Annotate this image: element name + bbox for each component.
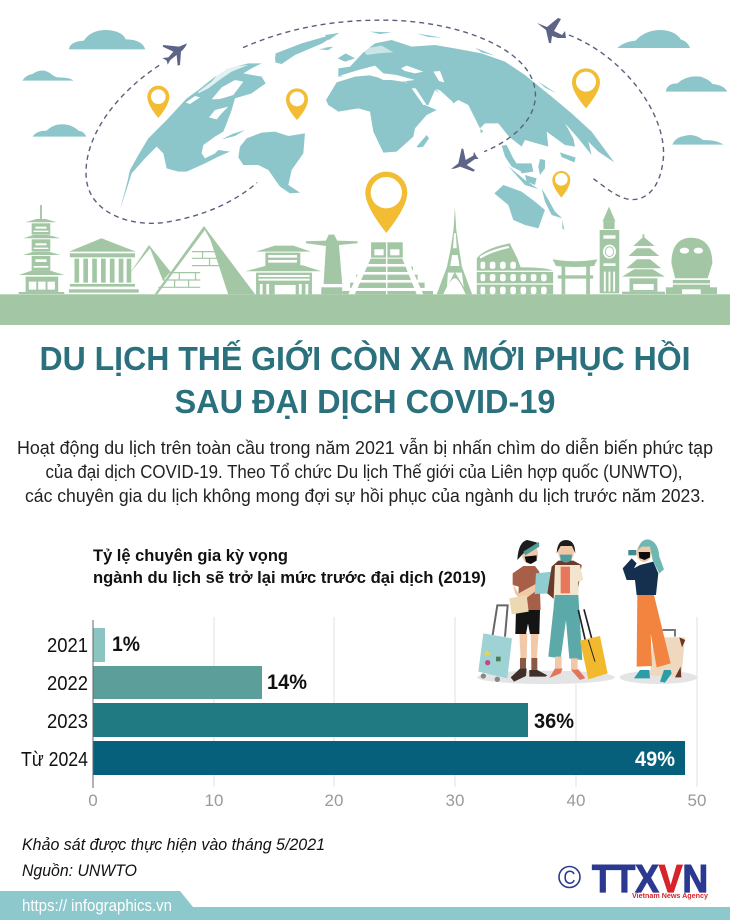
TTXVN logo: TTXVN [592, 858, 708, 901]
traveler with yellow suitcase [535, 540, 608, 680]
airplanes [162, 18, 566, 172]
footer band with URL [0, 891, 730, 920]
value labels: 36% [534, 710, 574, 733]
South America [238, 132, 305, 193]
bar: 2021 [94, 628, 105, 662]
category labels: 2022 [47, 673, 88, 695]
x axis labels: 50 [688, 791, 706, 810]
landmark: pagoda [19, 205, 64, 294]
landmark: pyramids [129, 226, 255, 294]
category labels: 2021 [47, 635, 88, 657]
British Isles and Arctic islands [325, 32, 557, 93]
bar: Từ 2024 [94, 741, 685, 775]
landmark: greek temple [69, 238, 139, 293]
title: DU LỊCH THẾ GIỚI CÒN XA MỚI PHỤC HỒI [40, 340, 690, 377]
chart title: Tỷ lệ chuyên gia kỳ vọng [93, 546, 288, 565]
intro paragraph: của đại dịch COVID-19. Theo Tổ chức Du lịch Thế giới của Liên hợp quốc (UNWTO), [46, 462, 682, 482]
footer band with URL: https:// infographics.vn [22, 896, 172, 915]
x axis labels [88, 791, 706, 810]
ground shadows [477, 671, 697, 684]
map pins [147, 68, 600, 233]
category labels: 2023 [47, 711, 88, 733]
world map: Americas [120, 33, 339, 210]
Africa [326, 75, 437, 153]
value labels [112, 633, 675, 771]
landmark: torii gate [553, 259, 597, 294]
clouds [22, 30, 727, 145]
dashed flight paths [86, 20, 664, 223]
survey note and source [22, 836, 325, 880]
landmark: Sphinx [666, 238, 717, 294]
intro paragraph: các chuyên gia du lịch không mong đợi sự hồi phục của ngành du lịch trước năm 2023. [25, 486, 705, 506]
bar: 2023 [94, 703, 528, 737]
value labels: 1% [112, 633, 140, 656]
chart title [93, 546, 486, 587]
title [40, 340, 690, 420]
value labels: 49% [635, 748, 675, 771]
hero illustration: world map and landmarks [0, 18, 730, 325]
landmark: Eiffel tower [437, 207, 472, 294]
title: SAU ĐẠI DỊCH COVID-19 [174, 383, 556, 420]
category labels: Từ 2024 [21, 749, 88, 771]
intro paragraph: Hoạt động du lịch trên toàn cầu trong năm 2021 vẫn bị nhấn chìm do diễn biến phức tạp [17, 437, 713, 458]
world map: Eurasia, Africa, Australia [325, 32, 614, 230]
TTXVN logo: C [564, 868, 576, 889]
category labels [21, 635, 88, 771]
landmark: Asian palace [245, 246, 321, 294]
Madagascar [417, 135, 429, 148]
illustration: masked travelers with suitcases [477, 539, 697, 684]
chart title: ngành du lịch sẽ trở lại mức trước đại dịch (2019) [93, 568, 486, 587]
intro paragraph [17, 437, 713, 506]
survey note and source: Khảo sát được thực hiện vào tháng 5/2021 [22, 836, 325, 854]
survey note and source: Nguồn: UNWTO [22, 862, 137, 880]
TTXVN logo: Vietnam News Agency [632, 891, 709, 900]
bar: 2022 [94, 666, 262, 699]
Australia [494, 185, 545, 228]
x axis labels: 0 [88, 791, 98, 810]
value labels: 14% [267, 671, 307, 694]
landmark: Big Ben [600, 207, 619, 293]
skyline and ground [0, 205, 730, 325]
Eurasia [338, 40, 614, 162]
x axis labels: 30 [446, 791, 464, 810]
traveler with teal suitcase [478, 540, 547, 682]
Mediterranean and inland seas [340, 66, 415, 82]
x axis labels: 20 [325, 791, 343, 810]
traveler with camera and beige suitcase [623, 539, 685, 683]
landmark: Colosseum [477, 243, 553, 294]
Southeast Asia islands [480, 129, 576, 230]
x axis labels: 10 [205, 791, 223, 810]
landmark: tiered temple [622, 234, 665, 294]
x axis labels: 40 [567, 791, 585, 810]
bar chart [21, 617, 706, 810]
landmark: Christ the Redeemer [306, 235, 358, 294]
landmark: Mayan pyramid [342, 242, 433, 294]
